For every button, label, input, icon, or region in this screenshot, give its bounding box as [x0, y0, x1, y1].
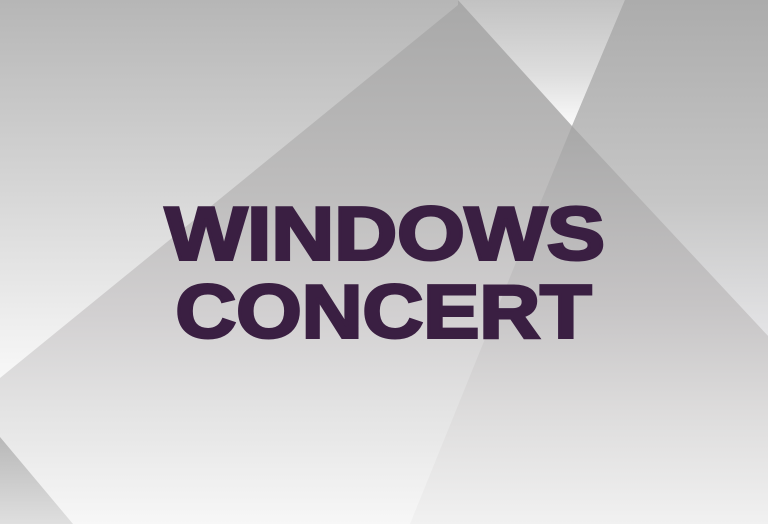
facet: top-left light panel [0, 0, 458, 378]
facet: lower-left triangle [0, 437, 73, 524]
title line: windows: WINDOWS [165, 192, 605, 276]
title [165, 192, 605, 354]
facet: lower-right dark panel [410, 126, 768, 524]
title line: concert: CONCERT [176, 270, 592, 354]
facet: top window highlight [458, 0, 625, 126]
facet: right panel [572, 0, 768, 336]
